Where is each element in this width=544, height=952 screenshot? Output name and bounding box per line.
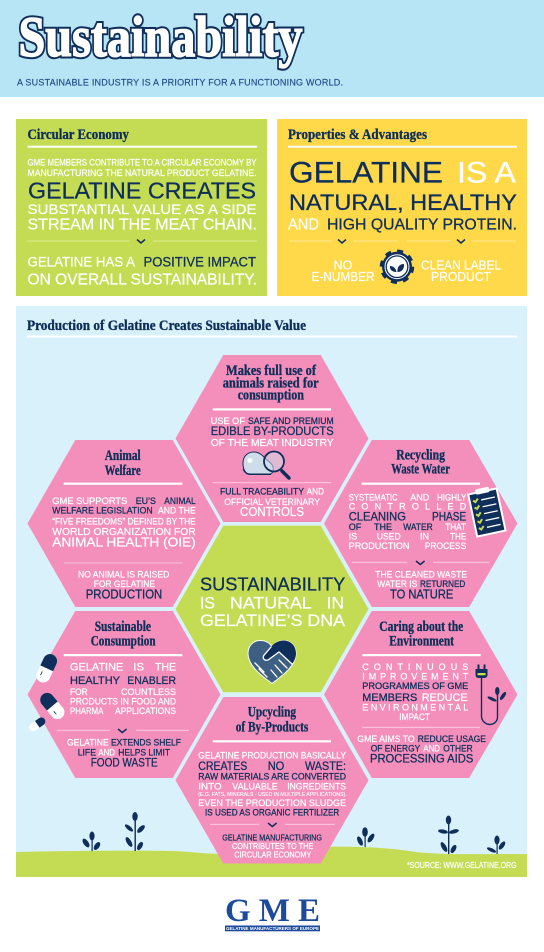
text block: no animal raised: FOR GELATINE xyxy=(94,579,155,590)
text block: sustainability dna: GELATINE’S DNA xyxy=(200,611,346,630)
divider with chevron xyxy=(210,823,335,826)
heading: recycling waste water: Recycling xyxy=(396,447,445,463)
text block: circular economy contribution: CONTRIBUTES TO THE xyxy=(232,841,314,851)
text block: traceability: OFFICIAL VETERINARY xyxy=(224,497,320,507)
hexagon: upcycling of by-products xyxy=(176,697,368,864)
text block: gelatine is natural: GELATINE xyxy=(289,157,443,190)
label: no e-number xyxy=(312,258,374,284)
text block: no waste: IS USED AS ORGANIC FERTILIZER xyxy=(205,808,340,818)
plant 1 xyxy=(81,832,102,851)
text block: circular economy intro: GELATINE CREATES xyxy=(28,178,256,204)
text block: healthy enabler: PHARMA xyxy=(70,706,104,717)
text block: circular economy intro: SUBSTANTIAL VALUE AS A SIDE xyxy=(28,201,256,217)
text block: healthy enabler: ENABLER xyxy=(127,675,176,687)
text block: eu legislation: WORLD ORGANIZATION FOR xyxy=(52,526,196,538)
text block: healthy enabler: GELATINE xyxy=(70,662,123,674)
text block: safe and premium: EDIBLE BY-PRODUCTS xyxy=(211,424,334,438)
heading: makes full use: Makes full use of xyxy=(226,363,317,379)
text block: no animal raised: PRODUCTION xyxy=(86,587,162,601)
text block: no waste: INTO xyxy=(198,781,222,792)
text block: cleaning phase: WATER xyxy=(403,522,433,532)
text block: gelatine is natural: AND xyxy=(288,216,319,233)
text block: cleaning phase: CONTROLLED xyxy=(349,501,467,511)
logo: GME: GELATINE MANUFACTURERS OF EUROPE xyxy=(226,926,319,931)
text block: shelf life: HELPS LIMIT xyxy=(118,748,170,759)
icon: clipboard xyxy=(468,485,506,537)
text block: returned to nature: THE CLEANED WASTE xyxy=(375,569,467,580)
text block: safe and premium: OF THE MEAT INDUSTRY xyxy=(211,437,334,449)
text block: continuous improvement: PROGRAMMES OF GME xyxy=(362,681,468,691)
text block: safe and premium xyxy=(211,416,334,449)
text block: healthy enabler xyxy=(70,662,176,717)
heading: recycling waste water: Waste Water xyxy=(391,461,450,477)
text block: no waste: VALUABLE xyxy=(232,781,278,792)
text block: shelf life: AND xyxy=(98,748,115,759)
text block: reduce usage: PROCESSING AIDS xyxy=(370,754,474,766)
text block: continuous improvement: CONTINUOUS xyxy=(362,662,468,672)
heading: sustainable consumption: Consumption xyxy=(91,633,156,649)
heading: sustainable consumption xyxy=(91,619,156,649)
text block: eu legislation: AND THE xyxy=(158,506,196,517)
text block: gelatine is natural xyxy=(288,157,517,233)
text block: no waste: EVEN THE PRODUCTION SLUDGE xyxy=(198,798,346,808)
text block: eu legislation: ANIMAL xyxy=(164,496,196,507)
text block: eu legislation xyxy=(52,496,196,550)
text block: reduce usage: AND xyxy=(423,744,440,755)
text block: sustainability dna: SUSTAINABILITY xyxy=(200,575,345,595)
text block: gelatine is natural: HIGH QUALITY PROTEIN. xyxy=(327,216,517,233)
text block: positive impact: ON OVERALL SUSTAINABILITY. xyxy=(28,271,257,288)
heading: animal welfare: Animal xyxy=(105,448,141,464)
heading: upcycling xyxy=(236,705,308,736)
text block: cleaning phase: AND xyxy=(410,492,430,502)
plant 2 xyxy=(124,812,146,851)
text block: returned to nature xyxy=(375,569,467,601)
text block: cleaning phase: THE xyxy=(450,532,466,542)
text block: cleaning phase: OF xyxy=(349,522,362,532)
subtitle: A SUSTAINABLE INDUSTRY IS A PRIORITY FOR A FUNCTIONING WORLD. xyxy=(17,78,343,88)
text block: eu legislation: GME SUPPORTS xyxy=(52,496,127,507)
text block: sustainability dna: IS xyxy=(200,593,215,612)
text block: traceability: FULL TRACEABILITY xyxy=(220,487,304,497)
heading: caring about the environment xyxy=(379,619,464,649)
text block: no waste: CREATES xyxy=(198,759,247,773)
label: clean label product: CLEAN LABEL xyxy=(421,258,501,272)
hexagon: sustainable consumption xyxy=(28,611,220,778)
panel: properties and advantages xyxy=(277,119,527,296)
text block: traceability xyxy=(220,487,324,519)
text block: shelf life xyxy=(67,738,181,770)
label: no e-number: E-NUMBER xyxy=(312,269,374,284)
label: clean label product: PRODUCT xyxy=(431,269,491,284)
text block: circular economy intro: GME MEMBERS CONTRIBUTE TO A CIRCULAR ECONOMY BY xyxy=(28,158,256,168)
text block: sustainability dna xyxy=(200,575,346,630)
icon: pill medium xyxy=(37,690,67,722)
text block: cleaning phase: IN xyxy=(420,532,429,542)
text block: cleaning phase: PHASE xyxy=(432,509,466,523)
heading: caring about the environment: Caring about the xyxy=(379,619,464,635)
icon: pill small xyxy=(28,716,47,733)
heading: recycling waste water xyxy=(391,447,450,477)
text block: returned to nature: TO NATURE xyxy=(390,587,453,601)
text block: no waste xyxy=(198,750,347,818)
text block: eu legislation: WELFARE LEGISLATION xyxy=(52,506,153,517)
text block: no waste: (E.G. FATS, MINERALS - USED IN MULTIPLE APPLICATIONS). xyxy=(198,792,347,798)
icon: handshake heart xyxy=(248,640,296,684)
text block: no animal raised: NO ANIMAL IS RAISED xyxy=(78,569,169,580)
hexagon: makes full use of animals xyxy=(176,355,368,522)
text block: circular economy intro xyxy=(28,158,257,233)
text block: cleaning phase xyxy=(349,492,467,551)
icon: meat and magnifier xyxy=(243,452,289,478)
text block: continuous improvement: ENVIRONMENTAL xyxy=(362,703,468,713)
text block: returned to nature: WATER IS xyxy=(377,579,417,590)
text block: reduce usage: GME AIMS TO xyxy=(357,734,415,745)
heading: upcycling: Upcycling xyxy=(248,705,296,721)
text block: sustainability dna: NATURAL xyxy=(230,593,312,612)
text block: circular economy contribution: CIRCULAR ECONOMY xyxy=(234,850,312,860)
hexagon: recycling waste water xyxy=(324,440,518,607)
text block: reduce usage: REDUCE USAGE xyxy=(418,734,486,745)
text block: continuous improvement: IMPROVEMENT xyxy=(362,672,469,682)
divider with chevron xyxy=(352,561,489,564)
text block: positive impact xyxy=(28,255,257,288)
text block: healthy enabler: HEALTHY xyxy=(70,675,121,687)
text block: no waste: NO xyxy=(268,759,284,773)
text block: no waste: RAW MATERIALS ARE CONVERTED xyxy=(198,771,346,782)
text block: cleaning phase: THE xyxy=(374,522,392,532)
text block: cleaning phase: THAT xyxy=(445,522,466,532)
heading: animal welfare: Welfare xyxy=(105,463,141,479)
text block: eu legislation: “FIVE FREEDOMS” DEFINED BY THE xyxy=(52,517,196,527)
text block: gelatine is natural: IS A xyxy=(457,157,516,190)
text block: healthy enabler: THE xyxy=(155,662,176,674)
text block: shelf life: FOOD WASTE xyxy=(91,758,158,770)
plant 5 xyxy=(486,836,507,854)
text block: safe and premium: USE OF xyxy=(211,416,246,426)
hexagon: animal welfare xyxy=(28,440,220,607)
text block: healthy enabler: COUNTLESS xyxy=(121,687,176,698)
text block: positive impact: POSITIVE IMPACT xyxy=(144,255,256,270)
text block: traceability: AND xyxy=(307,487,324,497)
text block: no waste: GELATINE PRODUCTION BASICALLY xyxy=(198,750,346,760)
text block: no animal raised xyxy=(78,569,169,601)
text block: cleaning phase: CLEANING xyxy=(349,509,406,523)
panel: circular economy xyxy=(16,119,267,296)
logo: GME: GME xyxy=(225,893,320,929)
panel: production of gelatine xyxy=(16,306,527,877)
divider with chevron xyxy=(57,729,189,732)
heading: production: Production of Gelatine Creates Sustainable Value xyxy=(27,318,306,334)
heading: caring about the environment: Environment xyxy=(389,633,454,649)
text block: continuous improvement: MEMBERS xyxy=(362,692,417,704)
text block: reduce usage xyxy=(357,734,486,766)
header band xyxy=(0,0,544,97)
text block: continuous improvement: IMPACT xyxy=(399,712,430,722)
text block: shelf life: EXTENDS SHELF xyxy=(111,738,181,749)
dividers with chevrons xyxy=(289,240,516,243)
ground xyxy=(16,847,527,877)
text block: cleaning phase: PRODUCTION xyxy=(349,541,409,551)
heading: upcycling: of By-Products xyxy=(236,720,308,736)
text block: cleaning phase: IS xyxy=(349,532,357,542)
text block: safe and premium: SAFE AND PREMIUM xyxy=(248,416,334,426)
title: Sustainability xyxy=(18,6,302,69)
text block: no waste: INGREDIENTS xyxy=(287,781,346,792)
heading: makes full use xyxy=(223,363,319,404)
text block: healthy enabler: APPLICATIONS xyxy=(115,706,176,717)
text block: circular economy intro: STREAM IN THE MEAT CHAIN. xyxy=(28,216,257,233)
text block: cleaning phase: PROCESS xyxy=(425,541,466,551)
text block: circular economy contribution xyxy=(222,833,322,860)
label: no e-number: NO xyxy=(334,258,352,272)
text block: cleaning phase: SYSTEMATIC xyxy=(349,492,398,502)
source note: *SOURCE: WWW.GELATINE.ORG xyxy=(407,861,516,870)
text block: healthy enabler: IS xyxy=(133,662,144,674)
text block: healthy enabler: FOR xyxy=(70,687,88,698)
text block: healthy enabler: PRODUCTS IN FOOD AND xyxy=(70,696,176,707)
text block: cleaning phase: USED xyxy=(377,532,401,542)
heading: makes full use: consumption xyxy=(238,388,305,404)
text block: returned to nature: RETURNED xyxy=(420,579,465,590)
text block: circular economy contribution: GELATINE MANUFACTURING xyxy=(222,833,322,843)
plant 4 xyxy=(438,816,459,854)
label: clean label product xyxy=(421,258,501,284)
heading: properties and advantages: Properties & Advantages xyxy=(288,127,427,143)
text block: reduce usage: OF ENERGY xyxy=(371,744,421,755)
heading: sustainable consumption: Sustainable xyxy=(95,619,151,635)
icon: pill large xyxy=(34,652,59,685)
text block: traceability: CONTROLS xyxy=(240,505,304,519)
heading: animal welfare xyxy=(105,448,141,479)
text block: gelatine is natural: NATURAL, HEALTHY xyxy=(289,190,517,215)
text block: positive impact: GELATINE HAS A xyxy=(28,255,135,270)
text block: reduce usage: OTHER xyxy=(443,744,473,755)
text block: eu legislation: EU’S xyxy=(136,496,156,507)
heading: circular economy: Circular Economy xyxy=(28,127,129,143)
text block: shelf life: LIFE xyxy=(78,748,96,759)
text block: shelf life: GELATINE xyxy=(67,738,109,749)
text block: circular economy intro: MANUFACTURING THE NATURAL PRODUCT GELATINE. xyxy=(28,168,256,178)
text block: continuous improvement xyxy=(362,662,469,722)
text block: no waste: WASTE: xyxy=(305,759,346,773)
title: Sustainability xyxy=(18,6,302,69)
divider with chevron xyxy=(27,240,257,243)
text block: eu legislation: ANIMAL HEALTH (OIE) xyxy=(52,535,196,550)
text block: sustainability dna: IN xyxy=(327,593,344,612)
icon: plug with plant xyxy=(476,664,507,724)
plant 3 xyxy=(356,827,376,847)
text block: cleaning phase: HIGHLY xyxy=(437,492,466,502)
hexagon: sustainability is natural xyxy=(176,526,368,692)
heading: makes full use: animals raised for xyxy=(223,375,319,391)
hexagon: caring about the environment xyxy=(324,611,518,778)
icon: leaf badge xyxy=(382,251,412,282)
text block: continuous improvement: REDUCE xyxy=(422,692,468,704)
